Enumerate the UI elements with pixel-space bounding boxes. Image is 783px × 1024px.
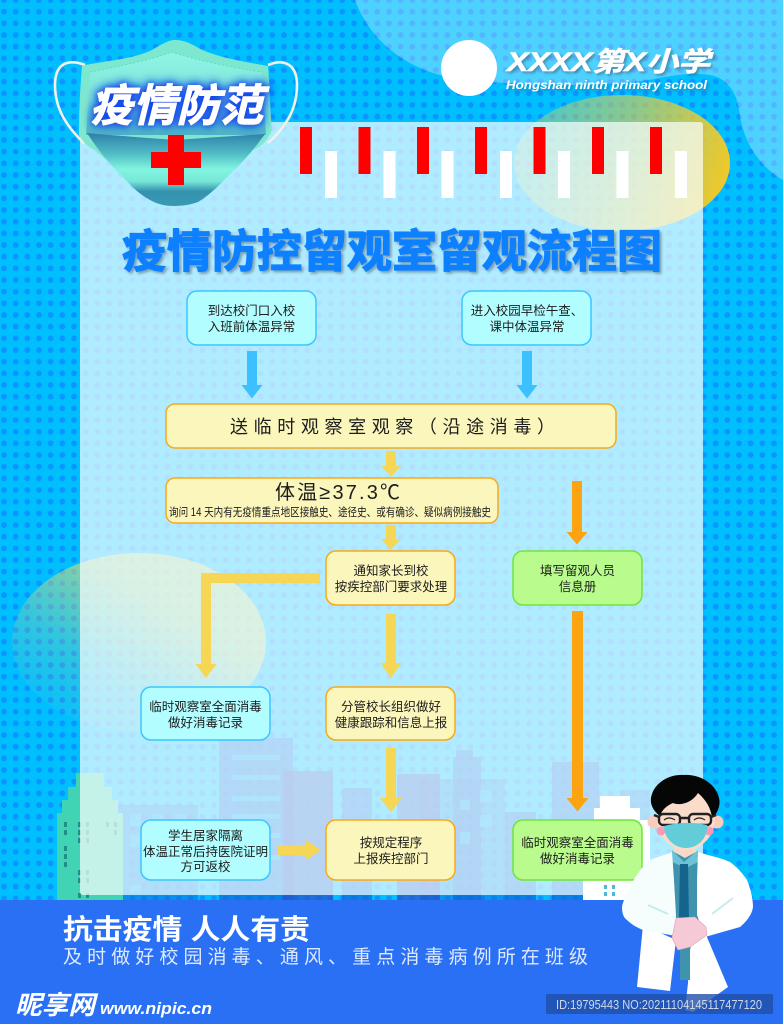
red cross	[151, 135, 201, 185]
arrow: yellow to notify	[381, 525, 401, 550]
box: arrive at school	[187, 291, 316, 345]
pale yellow ellipse	[12, 553, 266, 731]
coat lower right	[685, 930, 728, 1012]
box: report	[326, 820, 455, 880]
blush	[656, 826, 714, 836]
box: observation room: 送临时观察室观察（沿途消毒）	[230, 417, 555, 437]
top-right light blob	[355, 0, 783, 180]
box: temperature check: 询问 14 天内有无疫情重点地区接触史、途径史、或有确诊、疑似病例接触史	[169, 505, 491, 519]
box: notify parents: 通知家长到校	[353, 563, 429, 578]
banner heading: 抗击疫情 人人有责	[63, 914, 310, 945]
box: disinfect room	[141, 687, 270, 740]
mask illustration	[55, 40, 297, 206]
coat lower left	[637, 925, 676, 991]
face mask	[664, 823, 707, 848]
face	[657, 786, 715, 850]
arrow: yellow to temperature	[381, 451, 401, 476]
arrow: yellow elbow	[196, 573, 320, 678]
box: green disinfect: 临时观察室全面消毒	[521, 835, 634, 850]
tie	[679, 864, 689, 918]
building windows	[130, 755, 492, 893]
neck	[674, 840, 696, 858]
box: green disinfect	[513, 820, 642, 880]
mask upper panel	[86, 52, 266, 135]
hair	[651, 775, 720, 818]
box: notify parents: 按疾控部门要求处理	[335, 579, 448, 594]
box: morning check: 课中体温异常	[489, 319, 565, 334]
coat left sleeve	[622, 852, 676, 936]
main translucent panel	[80, 122, 703, 895]
box: notify parents	[326, 551, 455, 605]
box: fill register: 填写留观人员	[540, 564, 615, 578]
main title: 疫情防控留观室留观流程图	[122, 226, 662, 277]
school logo circle	[441, 40, 497, 96]
ear loops	[55, 62, 297, 143]
box: arrive at school: 入班前体温异常	[208, 319, 295, 334]
box: morning check	[462, 291, 591, 345]
box: report: 按规定程序	[360, 835, 422, 850]
box: health tracking	[326, 687, 455, 740]
box: temperature check: 体温≥37.3℃	[275, 481, 400, 504]
shirt	[672, 852, 698, 980]
arrow: blue left	[242, 351, 262, 398]
box: home isolation: 体温正常后持医院证明	[143, 844, 268, 859]
box: report: 上报疾控部门	[353, 851, 429, 866]
box: home isolation: 方可返校	[180, 859, 231, 874]
school english name: Hongshan ninth primary school	[506, 78, 708, 92]
white building	[583, 796, 650, 900]
collar	[672, 850, 698, 868]
school name: XXXX第X小学	[505, 47, 714, 77]
arrow: yellow to health tracking	[380, 614, 402, 678]
doctor illustration	[622, 775, 753, 1012]
skyline buildings	[118, 738, 650, 900]
green building	[57, 773, 123, 900]
box: morning check: 进入校园早检午查、	[471, 303, 583, 318]
box: fill register: 信息册	[559, 579, 596, 594]
watermark: www.nipic.cn	[100, 999, 212, 1018]
box: home isolation: 学生居家隔离	[168, 828, 243, 843]
box: health tracking: 分管校长组织做好	[341, 699, 441, 714]
arrow: orange to register	[566, 481, 588, 544]
box: temperature check	[166, 478, 498, 523]
watermark: 昵享网	[15, 990, 99, 1020]
arrow: yellow to report	[380, 748, 402, 812]
bottom banner	[0, 900, 783, 1024]
arrow: yellow right	[278, 840, 321, 860]
box: disinfect room: 做好消毒记录	[168, 715, 243, 730]
school name	[505, 47, 714, 92]
arrow: blue right	[516, 351, 538, 398]
mask lower body	[87, 133, 265, 206]
box: arrive at school: 到达校门口入校	[208, 303, 296, 318]
arrow: orange long	[566, 611, 588, 812]
box: green disinfect: 做好消毒记录	[540, 851, 615, 866]
watermark	[15, 990, 212, 1020]
coat right sleeve	[697, 852, 753, 937]
hands	[672, 917, 707, 950]
box: fill register	[513, 551, 642, 605]
box: home isolation	[141, 820, 270, 880]
decorative red and white bars	[300, 127, 687, 198]
image id strip	[546, 994, 773, 1014]
banner subtext: 及时做好校园消毒、通风、重点消毒病例所在班级	[63, 946, 588, 968]
mask title: 疫情防范	[90, 82, 270, 131]
yellow ellipse	[514, 95, 730, 231]
box: observation room	[166, 404, 616, 448]
mask outer border	[79, 40, 272, 165]
ears	[648, 816, 724, 828]
glasses	[654, 814, 716, 825]
box: health tracking: 健康跟踪和信息上报	[335, 715, 448, 730]
box: disinfect room: 临时观察室全面消毒	[149, 699, 262, 714]
